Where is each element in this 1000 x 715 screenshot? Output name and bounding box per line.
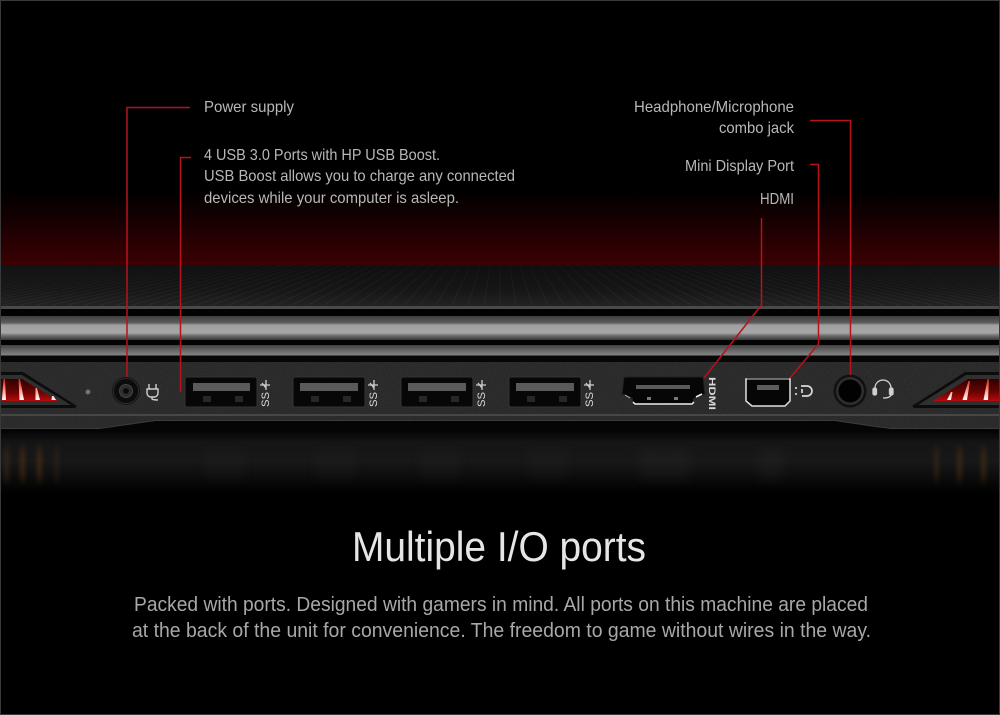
title: Multiple I/O ports bbox=[352, 523, 646, 570]
icon: headset bbox=[873, 380, 893, 398]
icon: SS USB 3 bbox=[476, 380, 488, 407]
USB port 2 bbox=[293, 377, 365, 407]
leader line: Mini DisplayPort bbox=[790, 164, 818, 378]
reflection below laptop bbox=[0, 428, 1000, 494]
textured laptop deck bbox=[0, 266, 1000, 307]
leader line: USB ports bbox=[180, 158, 191, 392]
label: headphone microphone bbox=[634, 99, 795, 137]
leader line: power supply bbox=[127, 108, 190, 377]
power supply port bbox=[112, 377, 140, 405]
icon: SS USB 1 bbox=[260, 380, 272, 407]
label: USB ports description: devices while your computer is asleep. bbox=[204, 190, 459, 207]
description: at the back of the unit for convenience. The freedom to game without wires in the way. bbox=[132, 620, 871, 642]
icon: SS USB 2: SS bbox=[368, 392, 380, 407]
icon: SS USB 2 bbox=[368, 380, 380, 407]
right vent bbox=[912, 372, 1000, 408]
label: USB ports description: USB Boost allows you to charge any connected bbox=[204, 168, 515, 185]
Mini DisplayPort bbox=[746, 379, 790, 406]
icon: SS USB 4 bbox=[584, 380, 596, 407]
icon: SS USB 4: SS bbox=[584, 392, 596, 407]
description: Packed with ports. Designed with gamers in mind. All ports on this machine are placed bbox=[134, 594, 868, 616]
icon: DisplayPort logo bbox=[796, 386, 812, 396]
icon: power plug bbox=[147, 384, 158, 400]
indicator LED bbox=[86, 390, 90, 394]
leader line: HDMI bbox=[704, 218, 762, 378]
label: power supply: Power supply bbox=[204, 99, 294, 116]
label: USB ports description: 4 USB 3.0 Ports with HP USB Boost. bbox=[204, 147, 440, 164]
laptop rear panel bbox=[0, 362, 1000, 432]
audio jack bbox=[834, 374, 866, 408]
label: Mini Display Port: Mini Display Port bbox=[685, 158, 795, 175]
label: headphone microphone: combo jack bbox=[719, 120, 795, 137]
left vent bbox=[0, 372, 77, 408]
label: USB ports description bbox=[204, 147, 515, 207]
description bbox=[132, 594, 871, 642]
leader line: headphone jack bbox=[810, 120, 850, 375]
red glow bbox=[0, 190, 1000, 266]
icon: SS USB 3: SS bbox=[476, 392, 488, 407]
icon: HDMI label: HDMI bbox=[707, 377, 717, 410]
HDMI port bbox=[622, 377, 705, 405]
USB port 4 bbox=[509, 377, 581, 407]
USB port 3 bbox=[401, 377, 473, 407]
laptop rear hinge bands bbox=[0, 306, 1000, 362]
label: HDMI: HDMI bbox=[760, 191, 794, 208]
label: headphone microphone: Headphone/Microphone bbox=[634, 99, 794, 116]
icon: SS USB 1: SS bbox=[260, 392, 272, 407]
USB port 1 bbox=[185, 377, 257, 407]
